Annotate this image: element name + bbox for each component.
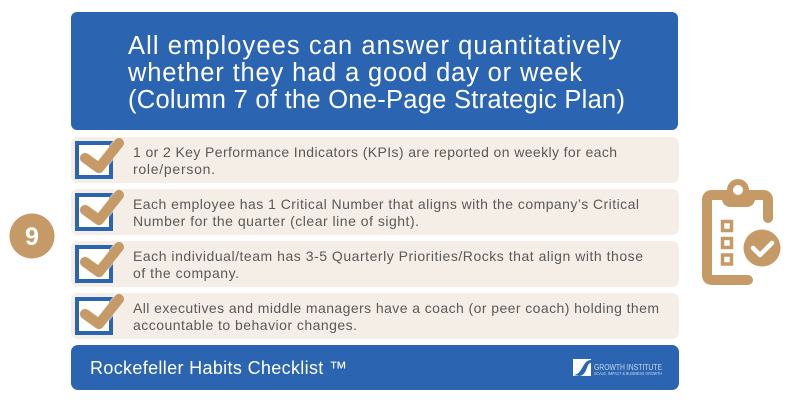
number badge: [10, 214, 54, 258]
panel: checklist item 3: [71, 241, 679, 287]
number badge: 9: [25, 223, 39, 251]
heading: whether they had a good day or week: [127, 59, 582, 87]
heading: All employees can answer quantitatively: [128, 32, 621, 60]
panel: checklist item 2: [71, 189, 679, 235]
panel: checklist item 1: [71, 137, 679, 183]
icon: clipboard with check: [707, 179, 780, 280]
panel: checklist item 4: [71, 293, 679, 339]
footer bar: [71, 345, 679, 390]
logo: Growth Institute: GROWTH INSTITUTE: [594, 363, 662, 372]
panel: checklist item 4: All executives and middle managers have a coach (or peer coach) holding them: [133, 300, 659, 316]
heading: (Column 7 of the One-Page Strategic Plan): [128, 86, 625, 114]
panel: checklist item 3: of the company.: [133, 265, 239, 281]
header panel: [71, 12, 678, 130]
panel: checklist item 2: Number for the quarter (clear line of sight).: [133, 213, 419, 229]
panel: checklist item 1: role/person.: [133, 161, 215, 177]
panel: checklist item 4: accountable to behavior changes.: [133, 317, 357, 333]
logo: Growth Institute: [573, 359, 662, 376]
panel: checklist item 1: 1 or 2 Key Performance Indicators (KPIs) are reported on weekly for each: [133, 144, 617, 160]
logo: Growth Institute: SCALE, IMPACT & BUSINESS GROWTH: [594, 371, 662, 376]
panel: checklist item 2: Each employee has 1 Critical Number that aligns with the company’s Critical: [133, 196, 639, 212]
footer title: Rockefeller Habits Checklist ™: [90, 358, 347, 378]
panel: checklist item 3: Each individual/team has 3-5 Quarterly Priorities/Rocks that align with those: [133, 248, 643, 264]
